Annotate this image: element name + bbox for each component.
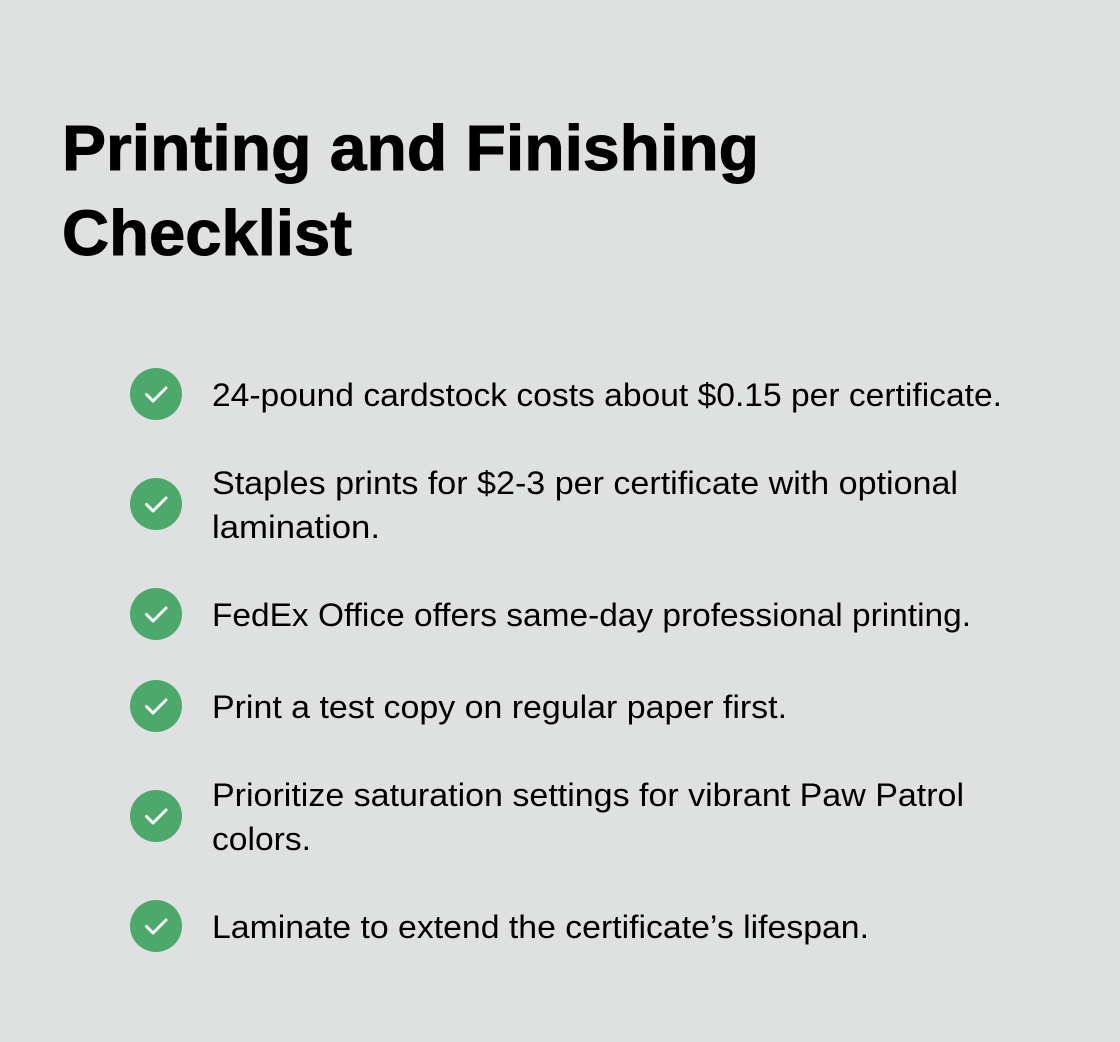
item: FedEx Office — [130, 588, 971, 640]
item: laminate: Laminate to extend the certificate’s lifespan. — [212, 909, 869, 945]
item: Staples printing: lamination. — [212, 509, 380, 545]
item: Staples printing — [130, 465, 958, 545]
item: FedEx Office: FedEx Office offers same-day professional printing. — [212, 597, 971, 633]
item: saturation settings: colors. — [212, 821, 311, 857]
title — [62, 112, 759, 269]
item: test copy — [130, 680, 787, 732]
item: cardstock cost — [130, 368, 1002, 420]
item: test copy: Print a test copy on regular paper first. — [212, 689, 787, 725]
title: Checklist — [62, 197, 352, 269]
title: Printing and Finishing — [62, 112, 759, 184]
item: saturation settings: Prioritize saturation settings for vibrant Paw Patrol — [212, 777, 964, 813]
item: saturation settings — [130, 777, 964, 857]
checklist — [130, 368, 1002, 952]
item: cardstock cost: 24-pound cardstock costs about $0.15 per certificate. — [212, 377, 1002, 413]
item: Staples printing: Staples prints for $2-3 per certificate with optional — [212, 465, 958, 501]
item: laminate — [130, 900, 869, 952]
